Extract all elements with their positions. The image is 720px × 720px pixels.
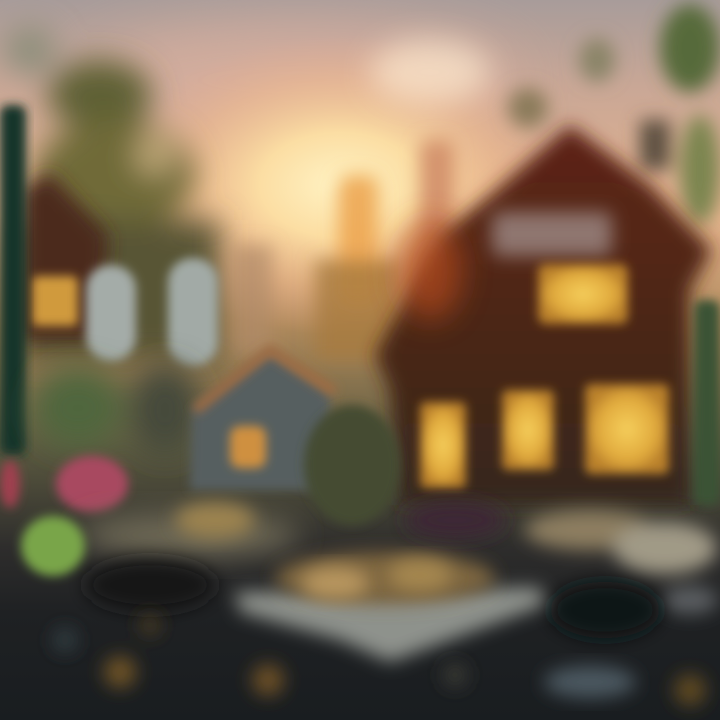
serving plate with food (235, 552, 545, 662)
green apple (21, 516, 85, 576)
lower middle window (502, 390, 554, 470)
right edge green plant (694, 300, 720, 505)
glowing attic window (538, 264, 628, 324)
tall dark tree at left edge (0, 105, 26, 455)
lower left window (420, 402, 466, 488)
pastry at centre left (175, 502, 255, 538)
round green bush (304, 405, 400, 525)
dark mounds (85, 559, 660, 638)
small house roof (195, 350, 335, 410)
sun glow (110, 35, 570, 335)
lower right window (585, 384, 669, 474)
small blue house (190, 350, 335, 490)
pink upper sky (80, 20, 520, 140)
left background trees (4, 26, 220, 360)
dark berries (405, 502, 505, 538)
roof glow (398, 220, 462, 320)
pink flowers (0, 456, 128, 512)
left shrubs (33, 365, 200, 455)
house body and roof (375, 125, 712, 505)
large house (375, 125, 712, 505)
golden specks on dark ground (53, 615, 706, 706)
distant city towers (232, 140, 454, 360)
top right trees (508, 4, 720, 225)
left house window (32, 276, 78, 326)
pale cloth left (80, 513, 300, 557)
upper grey window (492, 212, 612, 256)
food (275, 552, 495, 604)
left house (22, 172, 108, 340)
right side plates (525, 510, 718, 614)
pale arched windows (86, 258, 218, 366)
small house window (230, 426, 266, 468)
pale dish lower right (544, 666, 636, 698)
